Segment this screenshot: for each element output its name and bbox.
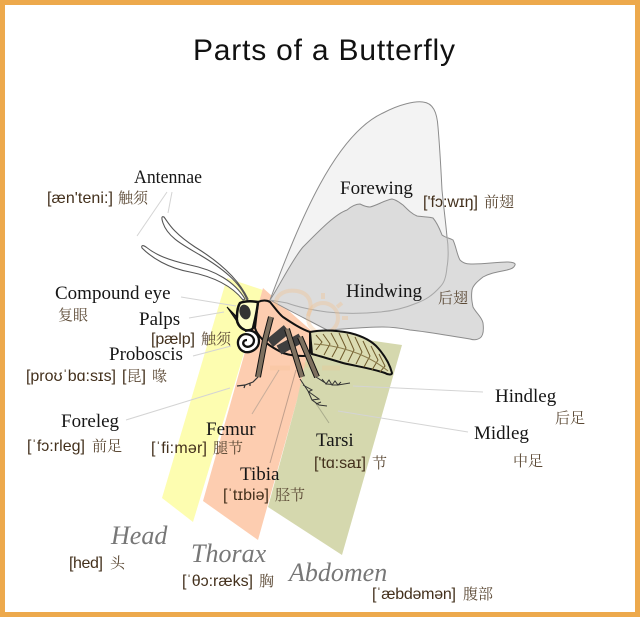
- note: antennae: 触须: [118, 187, 149, 208]
- label: forewing: Forewing: [340, 178, 413, 199]
- note: abdomen: 腹部: [463, 583, 493, 604]
- band: head: [162, 278, 263, 522]
- label: foreleg: Foreleg: [61, 411, 120, 432]
- region: thorax: Thorax: [191, 539, 267, 568]
- note: forewing: 前翅: [484, 191, 514, 212]
- note: foreleg: 前足: [92, 435, 122, 456]
- note: proboscis: 喙: [152, 365, 167, 386]
- region: head: Head: [110, 521, 168, 550]
- label: hindwing: Hindwing: [346, 281, 422, 302]
- note: thorax: 胸: [259, 570, 274, 591]
- note: femur: [ˈfi:mər]: [151, 440, 207, 457]
- note: tibia: [ˈtɪbiə]: [223, 487, 269, 504]
- label: midleg: Midleg: [474, 423, 529, 444]
- band: thorax: [203, 288, 315, 540]
- butterfly body: [142, 217, 392, 406]
- label: antennae: Antennae: [134, 167, 202, 188]
- note: palps: [pælp]: [151, 331, 195, 348]
- label: tibia: Tibia: [240, 464, 280, 485]
- note: antennae: [æn'teni:]: [47, 190, 113, 207]
- title: Parts of a Butterfly: [193, 34, 455, 67]
- note: hindwing: 后翅: [438, 287, 468, 308]
- note: tarsi: 节: [372, 452, 387, 473]
- note: head: [hed]: [69, 555, 103, 572]
- note: forewing: ['fɔ:wɪŋ]: [423, 194, 478, 211]
- hindwing: [270, 199, 515, 340]
- region: abdomen: Abdomen: [287, 558, 387, 587]
- note: hindleg: 后足: [555, 407, 585, 428]
- pronunciations and translations: [26, 187, 585, 604]
- label: femur: Femur: [206, 419, 256, 440]
- antennae: [142, 217, 248, 300]
- note: tibia: 胫节: [275, 484, 305, 505]
- watermark: [270, 291, 348, 368]
- note: tarsi: ['tɑ:saɪ]: [314, 455, 366, 472]
- abdomen: [310, 330, 392, 374]
- labels: anatomy terms: [55, 167, 557, 485]
- label: compound eye: Compound eye: [55, 283, 171, 304]
- thorax: [255, 300, 310, 356]
- note: proboscis: 昆]: [126, 365, 146, 386]
- label: palps: Palps: [139, 309, 180, 330]
- note: abdomen: [ˈæbdəmən]: [372, 586, 456, 603]
- label: hindleg: Hindleg: [495, 386, 557, 407]
- note: proboscis: [proʊˈbɑ:sɪs]: [26, 368, 116, 385]
- note: foreleg: [ˈfɔ:rleg]: [27, 438, 85, 455]
- note: compound eye: 复眼: [58, 304, 88, 325]
- palps: [227, 307, 240, 323]
- head: [237, 301, 258, 330]
- midleg: [287, 329, 302, 377]
- note: proboscis: [: [122, 368, 127, 385]
- note: midleg: 中足: [513, 450, 543, 471]
- compound eye: [238, 303, 252, 321]
- label: tarsi: Tarsi: [316, 430, 354, 451]
- foreleg: [258, 317, 271, 377]
- hindleg: [300, 337, 317, 377]
- note: palps: 触须: [201, 328, 232, 349]
- band: abdomen: [268, 332, 402, 555]
- femurs: [270, 329, 287, 343]
- forewing: [270, 102, 448, 314]
- note: thorax: [ˈθɔ:ræks]: [182, 573, 253, 590]
- note: head: 头: [110, 552, 126, 573]
- note: femur: 腿节: [213, 437, 243, 458]
- abdomen segments: [314, 333, 388, 372]
- leader lines: [126, 192, 483, 463]
- forewing edge over hindwing: [270, 237, 448, 314]
- region names: [110, 521, 387, 587]
- legs: [237, 317, 350, 406]
- proboscis: [238, 331, 259, 352]
- label: proboscis: Proboscis: [109, 344, 183, 365]
